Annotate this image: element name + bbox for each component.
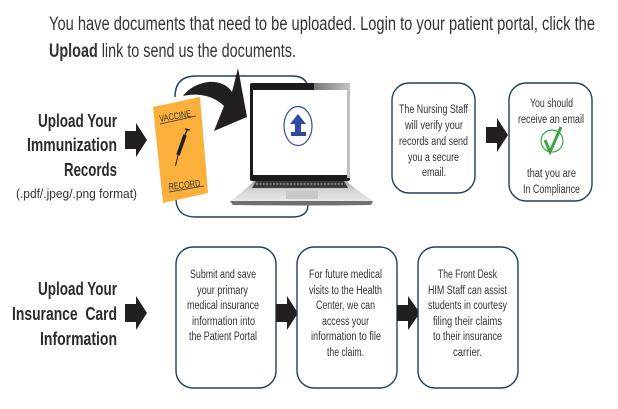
intro text xyxy=(49,14,595,62)
icon: laptop xyxy=(230,83,373,206)
panel: front desk: HIM Staff can assist xyxy=(428,285,508,297)
icon: curved arrow to laptop xyxy=(183,68,247,131)
panel: nursing staff: you a secure xyxy=(408,152,459,164)
intro text: Upload link to send us the documents. xyxy=(49,41,296,62)
heading: upload immunization records: Records xyxy=(64,160,117,180)
panel: compliance xyxy=(509,83,592,201)
icon: green check xyxy=(541,127,563,152)
heading: upload immunization records: Upload Your xyxy=(38,111,117,131)
panel: compliance: In Compliance xyxy=(523,184,580,196)
arrow: future visits to front desk xyxy=(397,296,420,330)
panel: submit and save: information into xyxy=(192,316,255,328)
heading: upload insurance card: Information xyxy=(40,329,117,349)
heading: upload immunization records: (.pdf/.jpeg/.png format) xyxy=(16,187,137,201)
panel: submit and save: medical insurance xyxy=(187,300,259,312)
panel: submit and save: your primary xyxy=(197,285,248,297)
icon: upload symbol xyxy=(284,106,312,146)
icon: vaccine record card: RECORD xyxy=(168,178,201,193)
panel: front desk: to their insurance xyxy=(433,331,502,343)
arrow: insurance to submit xyxy=(125,296,147,330)
panel: nursing staff xyxy=(392,83,475,193)
panel: submit and save: Submit and save xyxy=(190,269,256,281)
icon: syringe xyxy=(176,129,190,166)
arrow: immunization to card xyxy=(125,123,147,157)
heading: upload insurance card xyxy=(12,279,117,349)
panel: nursing staff: will verify your xyxy=(404,120,463,132)
heading: upload insurance card: Insurance Card xyxy=(12,304,117,324)
panel: submit and save xyxy=(176,247,276,388)
panel: front desk: filing their claims xyxy=(433,316,502,328)
panel: compliance: receive an email xyxy=(518,114,584,126)
panel: laptop frame xyxy=(175,76,308,217)
heading: upload immunization records: Immunization xyxy=(27,135,117,155)
panel: front desk: carrier. xyxy=(453,347,482,359)
panel: front desk xyxy=(418,247,518,388)
heading: upload immunization records xyxy=(16,111,137,201)
panel: future medical visits: the claim. xyxy=(327,347,364,359)
panel: front desk: students in courtesy xyxy=(428,300,507,312)
panel: compliance: that you are xyxy=(527,168,576,180)
icon: vaccine record card: VACCINE xyxy=(159,109,192,125)
panel: front desk: The Front Desk xyxy=(438,269,497,281)
heading: upload insurance card: Upload Your xyxy=(38,279,117,299)
arrow: submit to future visits xyxy=(276,296,298,330)
panel: nursing staff: records and send xyxy=(399,136,468,148)
icon: vaccine record card xyxy=(153,97,208,203)
panel: nursing staff: email. xyxy=(422,167,446,179)
panel: future medical visits: visits to the Health xyxy=(309,285,382,297)
arrow: nursing to compliance xyxy=(486,118,508,152)
panel: future medical visits: Center, we can xyxy=(316,300,375,312)
panel: future medical visits xyxy=(297,247,397,388)
panel: future medical visits: access your xyxy=(322,316,369,328)
panel: nursing staff: The Nursing Staff xyxy=(399,104,469,116)
panel: submit and save: the Patient Portal xyxy=(189,331,257,343)
panel: compliance: You should xyxy=(530,98,573,110)
panel: future medical visits: information to file xyxy=(311,331,381,343)
panel: future medical visits: For future medical xyxy=(309,269,382,281)
